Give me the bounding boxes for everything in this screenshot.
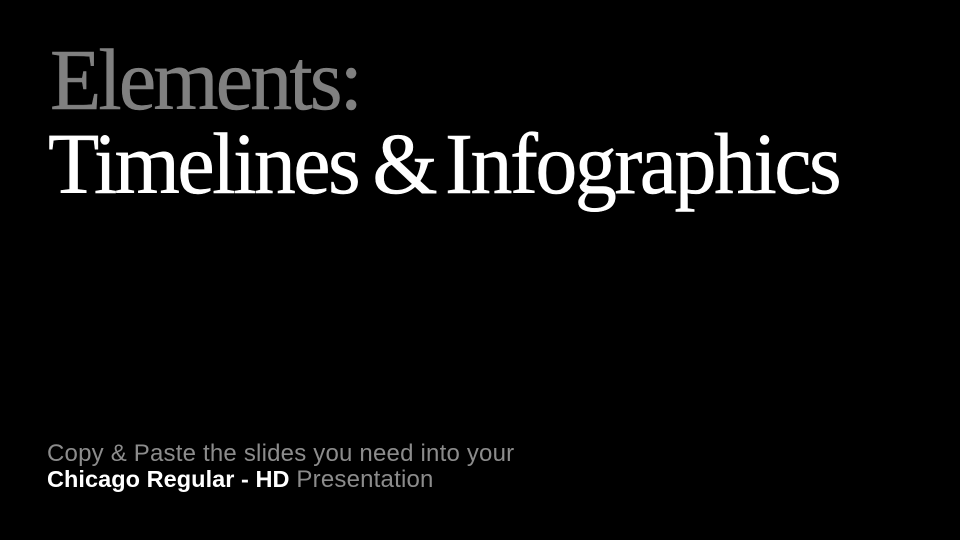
- text block: subtitle: Chicago Regular - HD Presentation: [47, 466, 434, 493]
- text block: subtitle: [47, 440, 514, 493]
- heading: Elements: Elements:: [50, 31, 360, 128]
- text block: subtitle: Copy & Paste the slides you need into your: [47, 440, 514, 467]
- heading: Timelines & Infographics: Timelines & Infographics: [48, 115, 839, 212]
